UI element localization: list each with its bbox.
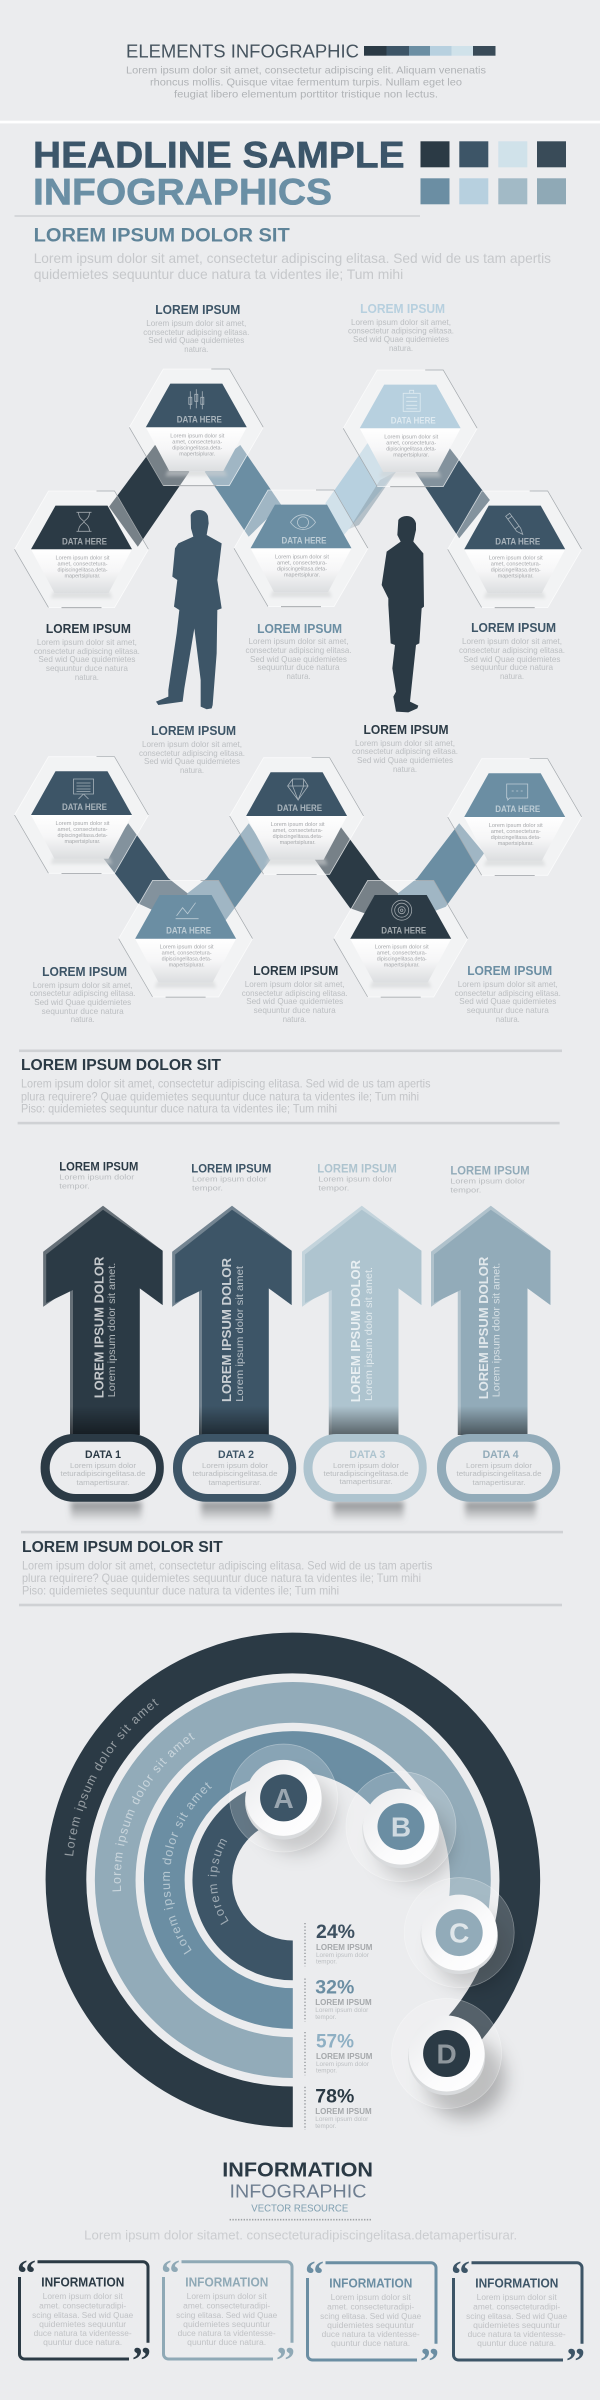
hexagon: clipboard: [343, 370, 477, 487]
hexagon: line chart: mapertsiplurar.: [169, 963, 205, 969]
intro paragraph: Lorem ipsum dolor sit amet, consectetur adipiscing elitasa. Sed wid de us tam apertis: [34, 250, 551, 266]
icon: pen: [506, 513, 523, 534]
arrow 2: LOREM IPSUM DOLOR: [219, 1257, 234, 1402]
label: top left lorem ipsum: [143, 303, 249, 354]
stat 24%: [305, 1922, 373, 1966]
label: chain two lower left: consectetur adipiscing elitasa.: [30, 989, 136, 998]
label: chain two lower left: LOREM IPSUM: [42, 965, 127, 979]
label: chain two lower centre: [242, 964, 348, 1024]
label: chain two lower right: consectetur adipiscing elitasa.: [455, 989, 561, 998]
label: chain two upper left: LOREM IPSUM: [151, 724, 236, 738]
radial chart rings: [66, 1653, 520, 2107]
information title block: Lorem ipsum dolor sitamet. consecteturadipiscingelitasa.detamapertisurar.: [84, 2228, 517, 2242]
ring captions: [64, 1698, 228, 1954]
hexagon: pen: mapertsiplurar.: [498, 573, 534, 579]
label: centre lower lorem ipsum: sequuntur duce natura: [258, 663, 340, 672]
quote box 3: quidemietes sequuntur: [327, 2321, 415, 2330]
information title block: [84, 2160, 517, 2242]
hexagon: clipboard: mapertsiplurar.: [393, 452, 429, 458]
data pill 4: Lorem ipsum dolor: [466, 1462, 533, 1470]
headline: INFOGRAPHICS: [33, 171, 332, 212]
hexagon: easel: Lorem ipsum dolor sit: [56, 821, 110, 827]
hexagon: eye: [234, 490, 368, 607]
marker C: [404, 1878, 514, 1988]
header title: ELEMENTS INFOGRAPHIC: [126, 40, 359, 61]
ring 4 inner: [212, 1800, 293, 1960]
hexagon: hourglass: DATA HERE: [62, 536, 107, 546]
quote box 1: [17, 2253, 151, 2382]
arrow column 4 label: LOREM IPSUM: [450, 1163, 530, 1177]
hexagon: disc: mapertsiplurar.: [384, 963, 420, 969]
hexagon: disc: [334, 880, 468, 997]
hexagon: hourglass: Lorem ipsum dolor sit: [56, 555, 110, 561]
ring 3: [164, 1752, 408, 2009]
intro paragraph: quidemietes sequuntur duce natura ta videntes ile; Tum mihi: [34, 266, 403, 282]
label: chain two upper right: Lorem ipsum dolor sit amet,: [355, 739, 455, 748]
stat 32%: [305, 1978, 372, 2022]
label: chain two lower left: sequuntur duce natura: [42, 1007, 124, 1016]
quote box 3: amet. consecteturadipi-: [327, 2302, 415, 2311]
label: left lower lorem ipsum: [34, 622, 140, 682]
arrow 4: LOREM IPSUM DOLOR: [476, 1256, 491, 1399]
arrow column 4 label: Lorem ipsum dolor: [450, 1177, 526, 1186]
hexagon: clipboard: amet, consectetura-: [386, 440, 436, 446]
connector bands: second hexagon chain: [103, 823, 484, 925]
label: right lower lorem ipsum: LOREM IPSUM: [471, 621, 556, 635]
stat 57%: Lorem ipsum dolor: [316, 2062, 369, 2068]
stat 32%: tempor.: [315, 2015, 337, 2021]
quote box 2: amet. consecteturadipi-: [183, 2301, 271, 2310]
label: chain two lower right: LOREM IPSUM: [467, 964, 552, 978]
intro paragraph: [34, 250, 551, 282]
label: chain two lower centre: Lorem ipsum dolor sit amet,: [245, 980, 345, 989]
hexagon: chat: mapertsiplurar.: [498, 841, 534, 847]
hexagon: eye: DATA HERE: [282, 535, 326, 545]
data pill 2: [173, 1434, 296, 1522]
arrow 2: Lorem ipsum dolor sit amet: [235, 1266, 246, 1402]
label: left lower lorem ipsum: Sed wid Quae quidemietes: [38, 655, 135, 664]
label: chain two lower left: Sed wid Quae quidemietes: [34, 998, 131, 1007]
label: top left lorem ipsum: LOREM IPSUM: [155, 303, 240, 317]
icon: chat bubble: [507, 784, 528, 800]
header description: [126, 66, 486, 100]
quote box 4: quidemietes sequuntur: [473, 2321, 561, 2330]
label: chain two lower right: Lorem ipsum dolor sit amet,: [458, 980, 558, 989]
stat 78%: 78%: [315, 2087, 354, 2108]
label: chain two upper right: Sed wid Quae quidemietes: [357, 756, 453, 765]
subheading: LOREM IPSUM DOLOR SIT: [34, 225, 290, 246]
marker A: A: [273, 1783, 294, 1814]
quote box 2: quuntur duce natura.: [187, 2338, 266, 2347]
hexagon: disc: dipiscingelitasa.deta-: [377, 957, 427, 963]
hexagon: pen: [448, 491, 582, 608]
quote box 1: amet. consecteturadipi-: [39, 2301, 127, 2310]
ring 1 outer dark: [66, 1653, 520, 2107]
hexagon: disc: Lorem ipsum dolor sit: [375, 945, 429, 951]
label: top right lorem ipsum: LOREM IPSUM: [360, 302, 445, 316]
quote box 1: scing elitasa. Sed wid Quae: [32, 2311, 134, 2320]
data pill 1: teturadipiscingelitasa.de: [60, 1470, 146, 1478]
quote box 4: amet. consecteturadipi-: [473, 2302, 561, 2311]
label: left lower lorem ipsum: Lorem ipsum dolor sit amet,: [37, 638, 137, 647]
hexagon: line chart: amet, consectetura-: [162, 951, 212, 957]
stat 24%: tempor.: [316, 1960, 337, 1966]
label: centre lower lorem ipsum: Lorem ipsum dolor sit amet,: [248, 637, 348, 646]
colour strip: [364, 46, 496, 56]
label: centre lower lorem ipsum: consectetur adipiscing elitasa.: [246, 646, 352, 655]
quote box 2: duce natura ta videntesse-: [178, 2329, 276, 2338]
hexagon: hourglass: mapertsiplurar.: [64, 573, 100, 579]
silhouette: man: [156, 510, 222, 709]
arrow column 3 label: tempor.: [318, 1184, 349, 1193]
arrow column 4 label: tempor.: [450, 1186, 481, 1195]
quote box 3: [305, 2254, 439, 2383]
label: chain two upper left: Sed wid Quae quidemietes: [144, 757, 240, 766]
data pill 4: teturadipiscingelitasa.de: [456, 1470, 542, 1478]
quote box 1: Lorem ipsum dolor sit: [43, 2292, 124, 2301]
arrow column 1 label: LOREM IPSUM: [59, 1159, 138, 1173]
stat 24%: Lorem ipsum dolor: [316, 1953, 369, 1959]
marker B: [346, 1772, 456, 1882]
hexagon: easel: DATA HERE: [62, 802, 107, 812]
hexagon: sliders: dipiscingelitasa.deta-: [172, 445, 223, 451]
marker D: [392, 1998, 505, 2118]
label: centre lower lorem ipsum: [246, 622, 352, 681]
data pill 4: tamapertisurar.: [472, 1479, 526, 1487]
quote box 3: Lorem ipsum dolor sit: [331, 2293, 412, 2302]
hexagon: pen: dipiscingelitasa.deta-: [491, 567, 541, 573]
hexagon: chat: amet, consectetura-: [491, 829, 541, 835]
ring 2: [115, 1702, 470, 2058]
label: top right lorem ipsum: Sed wid Quae quidemietes: [353, 335, 449, 344]
label: chain two lower left: natura.: [71, 1015, 95, 1024]
icon: presentation board: [74, 779, 94, 799]
stat 24%: LOREM IPSUM: [316, 1943, 373, 1952]
quote box 4: scing elitasa. Sed wid Quae: [466, 2312, 568, 2321]
quote box 3: quuntur duce natura.: [331, 2339, 410, 2348]
section heading: arrows: [21, 1057, 431, 1115]
label: chain two lower centre: natura.: [283, 1015, 307, 1024]
label: chain two lower centre: sequuntur duce natura: [254, 1006, 336, 1015]
label: chain two lower centre: consectetur adipiscing elitasa.: [242, 989, 348, 998]
label: top left lorem ipsum: Sed wid Quae quidemietes: [148, 336, 244, 345]
label: chain two upper right: [352, 723, 458, 774]
hexagon: pen: Lorem ipsum dolor sit: [489, 555, 543, 561]
hexagon: pen: amet, consectetura-: [491, 561, 541, 567]
hexagon: hourglass: dipiscingelitasa.deta-: [58, 567, 108, 573]
label: chain two upper right: LOREM IPSUM: [364, 723, 448, 737]
hexagon: clipboard: dipiscingelitasa.deta-: [386, 446, 436, 452]
icon: diamond: [288, 779, 308, 800]
label: top left lorem ipsum: Lorem ipsum dolor sit amet,: [146, 319, 246, 328]
hexagon: disc: amet, consectetura-: [377, 951, 427, 957]
header description: rhoncus mollis. Quisque vitae fermentum turpis. Nullam eget leo: [150, 78, 462, 88]
header description: feugiat libero elementum porttitor tristique non lectus.: [174, 90, 438, 100]
hexagon: line chart: dipiscingelitasa.deta-: [162, 957, 212, 963]
arrow column 2 label: tempor.: [192, 1184, 223, 1193]
hexagon: sliders: amet, consectetura-: [172, 439, 223, 445]
stat 57%: LOREM IPSUM: [316, 2052, 373, 2061]
quote box 2: ”: [276, 2340, 295, 2382]
arrow column 3 label: [317, 1161, 397, 1193]
quote box 2: INFORMATION: [185, 2276, 268, 2290]
header description: Lorem ipsum dolor sit amet, consectetur adipiscing elit. Aliquam venenatis: [126, 66, 486, 76]
stat 32%: Lorem ipsum dolor: [315, 2008, 368, 2014]
label: chain two lower centre: LOREM IPSUM: [253, 964, 338, 978]
data pill 4: [437, 1434, 560, 1522]
data pill 3: teturadipiscingelitasa.de: [324, 1470, 409, 1478]
data pill 3: tamapertisurar.: [340, 1478, 393, 1486]
headline: [33, 135, 404, 212]
hexagon: diamond: amet, consectetura-: [273, 828, 323, 834]
quote box 4: quuntur duce natura.: [477, 2339, 556, 2348]
arrow 4: [431, 1206, 550, 1435]
hexagon: diamond: dipiscingelitasa.deta-: [273, 834, 323, 840]
arrow column 3 label: Lorem ipsum dolor: [318, 1175, 393, 1184]
label: chain two upper left: natura.: [180, 766, 204, 775]
hexagon: line chart: Lorem ipsum dolor sit: [160, 945, 214, 951]
label: chain two upper right: natura.: [393, 765, 417, 774]
silhouette: woman: [382, 516, 424, 712]
label: top right lorem ipsum: consectetur adipiscing elitasa.: [348, 326, 454, 336]
data pill 1: DATA 1: [85, 1449, 121, 1461]
hexagon: sliders: mapertsiplurar.: [179, 451, 215, 457]
hexagon: eye: amet, consectetura-: [277, 560, 327, 566]
label: top right lorem ipsum: [348, 302, 454, 353]
arrow 4: Lorem ipsum dolor sit amet.: [492, 1263, 503, 1397]
quote box 3: scing elitasa. Sed wid Quae: [320, 2312, 422, 2321]
hexagon: easel: [14, 757, 148, 873]
stat 78%: Lorem ipsum dolor: [315, 2117, 368, 2123]
marker B: B: [391, 1812, 411, 1843]
label: chain two upper right: consectetur adipiscing elitasa.: [352, 747, 458, 756]
section heading: rings: Piso: quidemietes sequuntur duce natura ta videntes ile; Tum mihi: [22, 1584, 339, 1598]
stat 32%: 32%: [315, 1978, 354, 1998]
quote box 4: “: [451, 2254, 470, 2296]
hexagon: chat: dipiscingelitasa.deta-: [491, 835, 541, 841]
hexagon: disc: DATA HERE: [381, 926, 426, 936]
headline: HEADLINE SAMPLE: [33, 135, 404, 176]
section heading: rings: Lorem ipsum dolor sit amet, consectetur adipiscing elitasa. Sed wid de us tam apertis: [22, 1559, 432, 1573]
label: right lower lorem ipsum: Sed wid Quae quidemietes: [464, 655, 560, 664]
data pill 1: tamapertisurar.: [76, 1479, 130, 1487]
hexagon: hourglass: [14, 491, 148, 608]
label: chain two upper left: consectetur adipiscing elitasa.: [139, 749, 245, 758]
icon: line chart: [176, 903, 199, 919]
arrow column 1 label: tempor.: [59, 1182, 90, 1191]
quote box 1: quidemietes sequuntur: [39, 2320, 127, 2329]
quote box 3: ”: [420, 2341, 439, 2383]
quote box 3: duce natura ta videntesse-: [322, 2330, 420, 2339]
data pill 2: teturadipiscingelitasa.de: [192, 1470, 278, 1478]
hexagon: eye: mapertsiplurar.: [284, 572, 320, 578]
hexagon: diamond: [230, 758, 364, 874]
icon: disc: [392, 900, 412, 920]
label: right lower lorem ipsum: Lorem ipsum dolor sit amet,: [462, 637, 562, 646]
section heading: rings: [22, 1539, 432, 1598]
marker A: [230, 1744, 338, 1853]
hexagon: line chart: [119, 880, 253, 997]
label: chain two upper left: Lorem ipsum dolor sit amet,: [142, 740, 242, 749]
section heading: rings: plura requirere? Quae quidemietes sequuntur duce natura ta videntes ile; Tum mihi: [22, 1571, 421, 1585]
label: chain two lower right: natura.: [496, 1015, 520, 1024]
quote box 3: “: [305, 2254, 324, 2296]
hexagon: diamond: Lorem ipsum dolor sit: [271, 822, 325, 828]
quote box 3: INFORMATION: [329, 2276, 412, 2290]
label: right lower lorem ipsum: sequuntur duce natura: [471, 663, 553, 672]
quote box 1: ”: [132, 2340, 151, 2382]
hexagon: chat: [448, 759, 582, 875]
section heading: arrows: plura requirere? Quae quidemietes sequuntur duce natura ta videntes ile; Tum mihi: [21, 1089, 419, 1103]
label: left lower lorem ipsum: natura.: [75, 673, 99, 682]
top header: elements infographic: [126, 40, 496, 100]
data pill 3: [304, 1434, 427, 1522]
hexagon: diamond: DATA HERE: [277, 803, 322, 813]
label: right lower lorem ipsum: natura.: [500, 672, 524, 681]
connector bands: first hexagon chain: [109, 443, 490, 547]
quote box 2: [161, 2253, 295, 2382]
stat 78%: LOREM IPSUM: [315, 2107, 372, 2116]
ring captions: Lorem ipsum dolor sit amet: [64, 1698, 159, 1856]
quote box 4: duce natura ta videntesse-: [468, 2330, 566, 2339]
data pill 1: Lorem ipsum dolor: [70, 1462, 137, 1470]
label: right lower lorem ipsum: [459, 621, 565, 681]
section heading: arrows: Lorem ipsum dolor sit amet, consectetur adipiscing elitasa. Sed wid de us tam apertis: [21, 1076, 431, 1090]
information title block: INFOGRAPHIC: [230, 2181, 366, 2201]
hexagon: line chart: DATA HERE: [166, 926, 211, 936]
arrow 1: LOREM IPSUM DOLOR: [91, 1256, 106, 1398]
marker C: C: [449, 1918, 469, 1949]
label: top left lorem ipsum: consectetur adipiscing elitasa.: [143, 328, 249, 337]
label: top left lorem ipsum: natura.: [184, 345, 208, 354]
stat 32%: LOREM IPSUM: [315, 1998, 372, 2007]
quote box 1: “: [17, 2253, 36, 2295]
hexagon: sliders: [129, 369, 263, 486]
arrow 3: Lorem ipsum dolor sit amet.: [364, 1267, 375, 1401]
hexagon: chat: DATA HERE: [495, 804, 540, 814]
quote box 1: quuntur duce natura.: [43, 2338, 122, 2347]
stat 78%: tempor.: [315, 2124, 337, 2130]
icon: sliders: [189, 389, 204, 409]
label: top right lorem ipsum: natura.: [389, 344, 413, 353]
quote box 4: Lorem ipsum dolor sit: [477, 2293, 558, 2302]
hexagon: easel: mapertsiplurar.: [64, 839, 100, 845]
label: chain two lower right: sequuntur duce natura: [467, 1006, 549, 1015]
label: chain two lower left: [30, 965, 136, 1024]
stat 57%: tempor.: [316, 2068, 337, 2074]
hexagon: diamond: mapertsiplurar.: [280, 840, 316, 846]
arrow 3: LOREM IPSUM DOLOR: [348, 1259, 363, 1402]
label: chain two upper left: [139, 724, 245, 775]
section heading: arrows: Piso: quidemietes sequuntur duce natura ta videntes ile; Tum mihi: [21, 1101, 337, 1115]
hexagon: chat: Lorem ipsum dolor sit: [489, 823, 543, 829]
colour swatches: [420, 141, 566, 204]
label: centre lower lorem ipsum: Sed wid Quae quidemietes: [250, 655, 347, 664]
label: centre lower lorem ipsum: LOREM IPSUM: [257, 622, 342, 636]
label: chain two lower right: [455, 964, 561, 1024]
data pill 4: DATA 4: [483, 1449, 519, 1461]
hexagon: clipboard: Lorem ipsum dolor sit: [384, 434, 439, 440]
label: chain two lower centre: Sed wid Quae quidemietes: [246, 997, 343, 1006]
arrow 1: [43, 1206, 163, 1435]
information title block: VECTOR RESOURCE: [251, 2203, 348, 2214]
arrow column 1 label: Lorem ipsum dolor: [59, 1173, 135, 1182]
label: chain two lower left: Lorem ipsum dolor sit amet,: [33, 981, 133, 990]
quote box 2: quidemietes sequuntur: [183, 2320, 271, 2329]
quote box 2: “: [161, 2253, 180, 2295]
hexagon: sliders: Lorem ipsum dolor sit: [170, 433, 225, 439]
data pill 2: DATA 2: [218, 1449, 254, 1461]
arrow column 2 label: Lorem ipsum dolor: [192, 1175, 267, 1184]
label: left lower lorem ipsum: sequuntur duce natura: [46, 664, 128, 673]
arrow 2: [172, 1206, 292, 1435]
stat 24%: 24%: [316, 1922, 355, 1943]
hexagon: pen: DATA HERE: [495, 536, 540, 546]
hexagon: hourglass: amet, consectetura-: [58, 561, 108, 567]
quote box 2: scing elitasa. Sed wid Quae: [176, 2311, 278, 2320]
information title block: INFORMATION: [222, 2160, 373, 2182]
ring captions: Lorem ipsum dolor sit amet: [162, 1782, 212, 1954]
ring captions: Lorem ipsum: [208, 1838, 228, 1925]
section heading: arrows: LOREM IPSUM DOLOR SIT: [21, 1057, 222, 1074]
quote box 4: INFORMATION: [475, 2276, 558, 2290]
icon: eye: [290, 515, 316, 529]
label: left lower lorem ipsum: consectetur adipiscing elitasa.: [34, 647, 140, 656]
label: right lower lorem ipsum: consectetur adipiscing elitasa.: [459, 646, 565, 655]
arrow column 1 label: [59, 1159, 138, 1191]
quote box 4: ”: [566, 2341, 585, 2383]
hexagon: easel: dipiscingelitasa.deta-: [58, 833, 108, 839]
arrow column 4 label: [450, 1163, 530, 1195]
quote box 4: [451, 2254, 585, 2383]
quote box 2: Lorem ipsum dolor sit: [187, 2292, 268, 2301]
icon: hourglass: [76, 512, 92, 531]
arrow column 2 label: [191, 1161, 271, 1193]
label: left lower lorem ipsum: LOREM IPSUM: [46, 622, 131, 636]
hexagon: sliders: DATA HERE: [177, 414, 222, 424]
quote box 1: INFORMATION: [41, 2276, 124, 2290]
quote box 1: duce natura ta videntesse-: [34, 2329, 132, 2338]
data pill 1: [41, 1434, 164, 1522]
stat 57%: 57%: [316, 2032, 354, 2052]
arrow 1: Lorem ipsum dolor sit amet.: [107, 1263, 118, 1397]
data pill 3: DATA 3: [349, 1449, 385, 1461]
data pill 3: Lorem ipsum dolor: [333, 1462, 400, 1470]
marker D: D: [436, 2038, 457, 2070]
label: centre lower lorem ipsum: natura.: [286, 672, 310, 681]
hexagon: eye: dipiscingelitasa.deta-: [277, 566, 327, 572]
data pill 2: tamapertisurar.: [208, 1479, 262, 1487]
label: top right lorem ipsum: Lorem ipsum dolor sit amet,: [351, 318, 451, 327]
arrow column 2 label: LOREM IPSUM: [191, 1161, 271, 1175]
label: chain two lower right: Sed wid Quae quidemietes: [459, 997, 556, 1006]
section heading: rings: LOREM IPSUM DOLOR SIT: [22, 1539, 223, 1556]
hexagon: clipboard: DATA HERE: [391, 415, 436, 425]
arrow 3: [302, 1206, 421, 1435]
stat 57%: [305, 2032, 373, 2075]
stat 78%: [305, 2087, 372, 2130]
hexagon: eye: Lorem ipsum dolor sit: [275, 554, 330, 560]
hexagon: easel: amet, consectetura-: [58, 827, 108, 833]
icon: clipboard: [403, 390, 420, 411]
arrow column 3 label: LOREM IPSUM: [317, 1161, 397, 1175]
data pill 2: Lorem ipsum dolor: [202, 1462, 269, 1470]
ring captions: Lorem ipsum dolor sit amet: [112, 1732, 195, 1892]
